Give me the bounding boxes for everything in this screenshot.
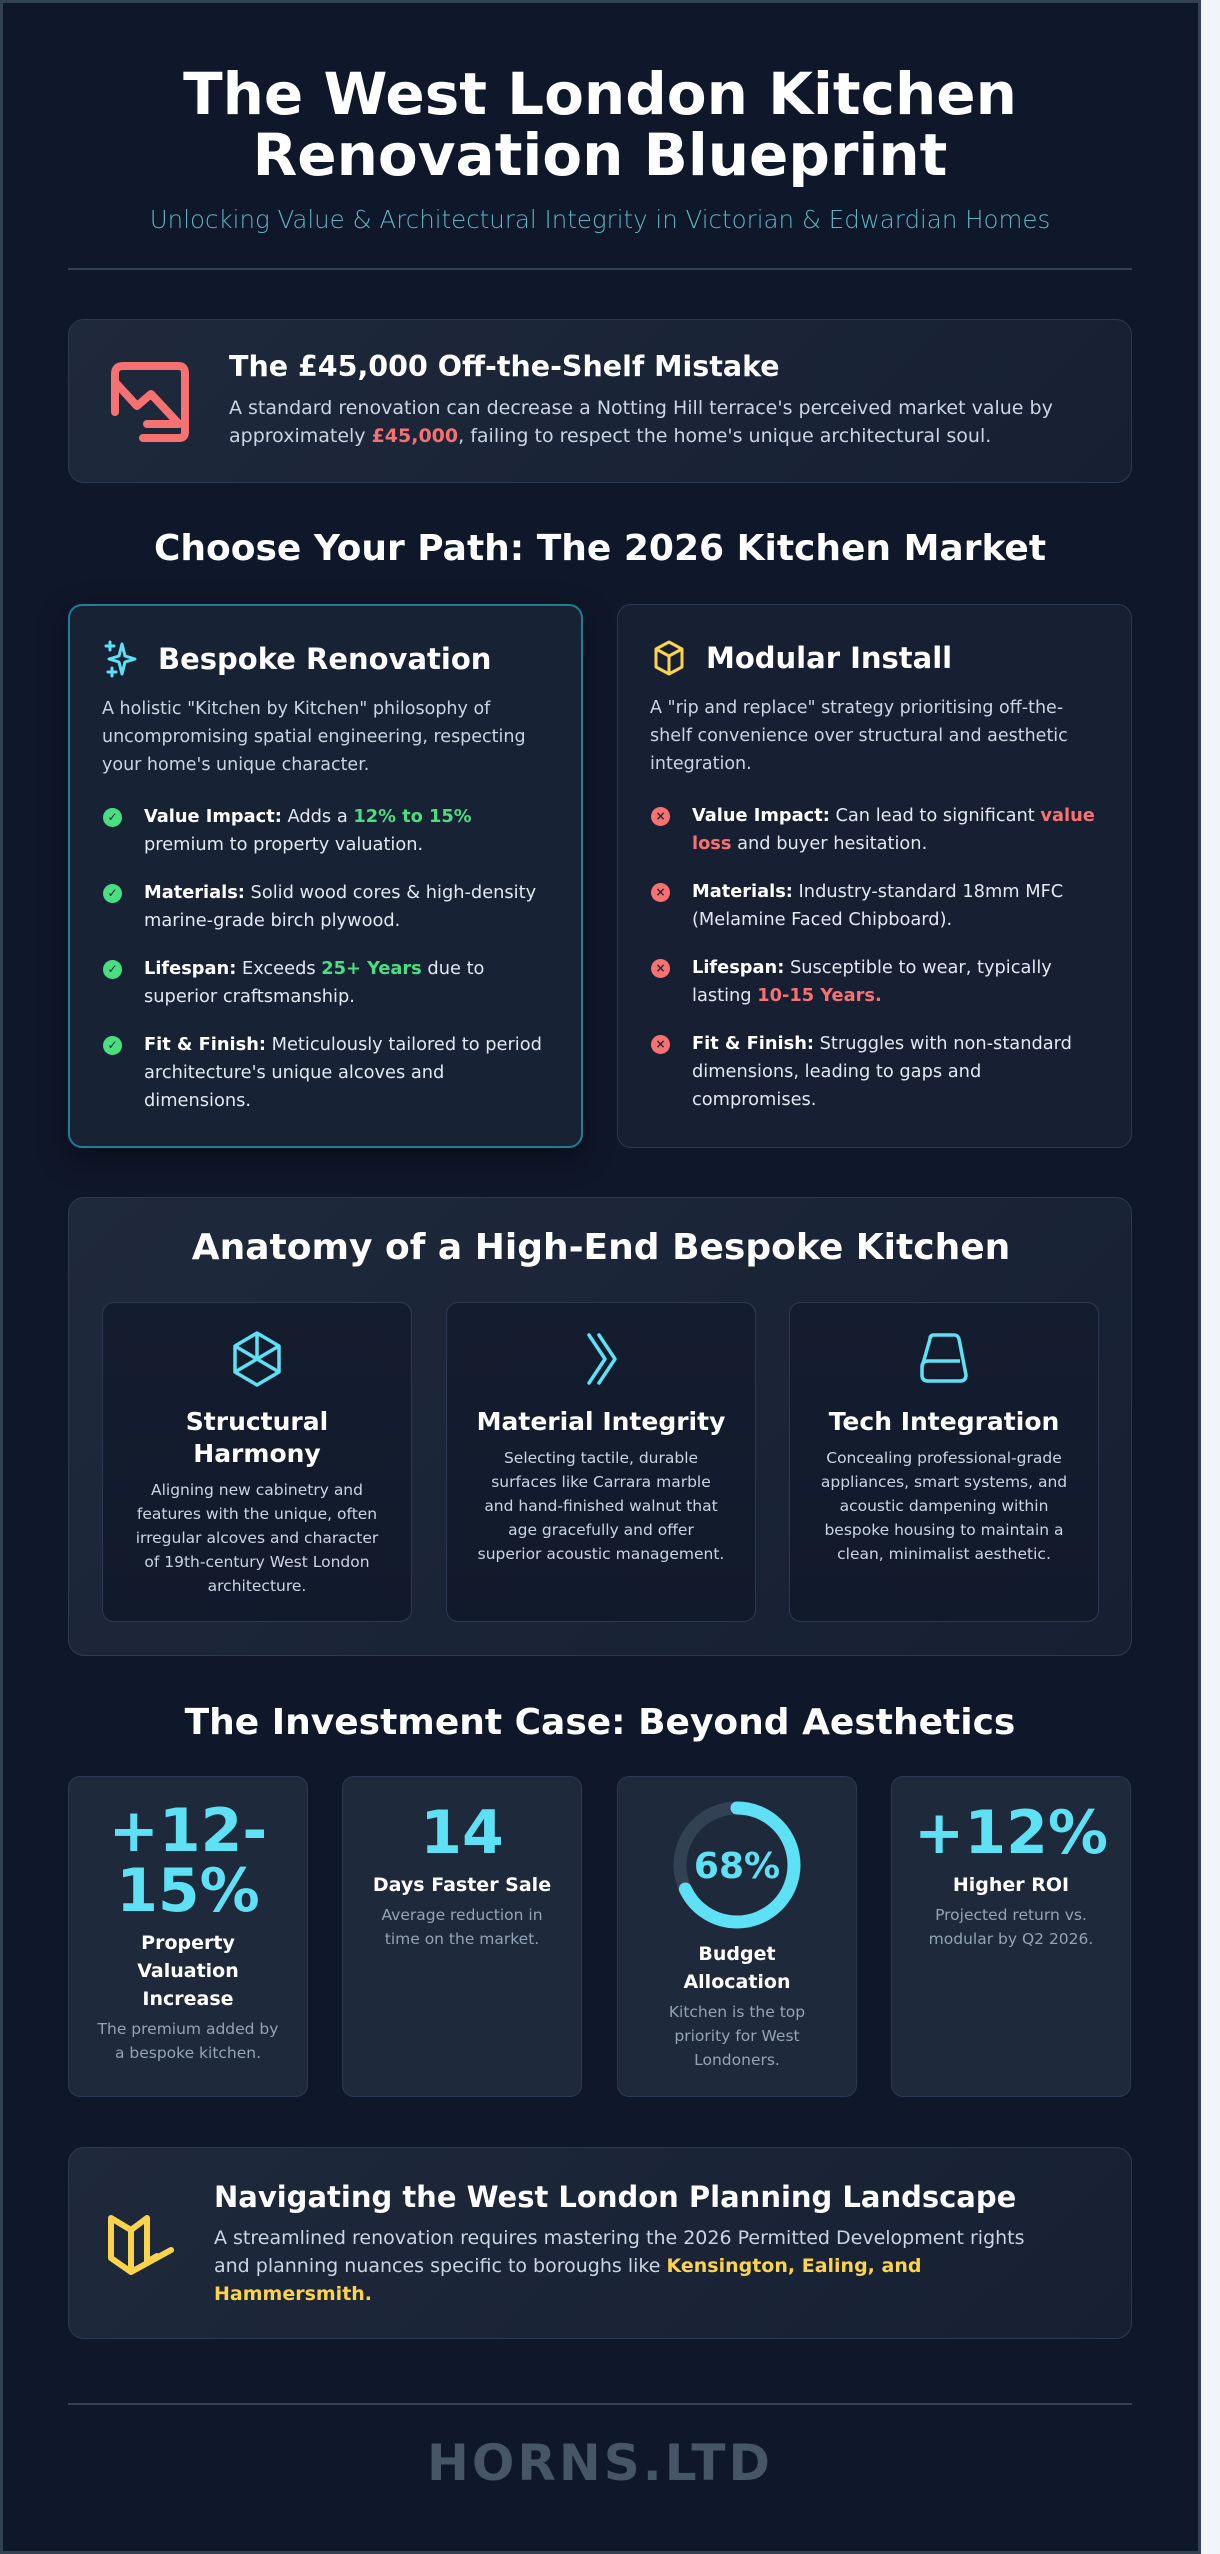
sub-card: material integrity: and hand-finished walnut that [484,1497,718,1515]
stat: ROI [891,1776,1131,2097]
stat: ROI: +12% [914,1798,1108,1868]
bespoke items [103,806,542,1111]
stat: ROI: modular by Q2 2026. [929,1930,1093,1948]
heading: investment case: The Investment Case: Beyond Aesthetics [185,1702,1015,1743]
icon: cube [233,1331,281,1387]
modular items: Fit & Finish: Struggles with non-standard dimensions, leading to gaps and compromises. [692,1033,1072,1110]
modular items: Lifespan: Susceptible to wear, typically lasting 10-15 Years. [692,957,1052,1006]
sub-card: tech integration: Concealing professional-grade appliances, smart systems, and acoustic dampening within bespoke housing to maintain a clean, minimalist aesthetic. [821,1449,1067,1563]
bespoke items: Materials: Solid wood cores & high-density marine-grade birch plywood. [144,882,536,931]
bespoke items: ✓ [107,1038,118,1052]
stat: budget donut: Allocation [683,1971,791,1993]
modular items: × [655,809,666,823]
modular items: Materials: Industry-standard 18mm MFC (Melamine Faced Chipboard). [692,881,1063,930]
modular items: × [655,1037,666,1051]
stat: valuation [68,1776,308,2097]
title: The West London Kitchen [183,60,1017,128]
sub-card: material integrity: Material Integrity [477,1407,725,1436]
sub-card: tech integration: Tech Integration [829,1407,1059,1436]
planning body: A streamlined renovation requires mastering the 2026 Permitted Development rights and planning nuances specific to boroughs like Kensington, Ealing, and Hammersmith. [214,2227,1025,2305]
panel: anatomy [68,1197,1132,1656]
modular items: × [655,885,666,899]
modular items: × [655,961,666,975]
bespoke items: ✓ [107,810,118,824]
sub-card: material integrity: Selecting tactile, durable [504,1449,698,1467]
planning heading: Navigating the West London Planning Landscape [214,2180,1016,2214]
stat: budget donut: Budget [698,1943,776,1965]
stat: ROI: Higher ROI [953,1874,1069,1896]
modular items [651,805,1095,1110]
heading: modular: Modular Install [706,641,952,675]
callout heading: The £45,000 Off-the-Shelf Mistake [229,350,780,383]
stat: valuation: Valuation [137,1960,239,1982]
sub-card: material integrity: superior acoustic management. [478,1545,724,1563]
callout: 45000 mistake [68,319,1132,483]
stat: valuation: 15% [116,1856,260,1926]
panel: modular install [617,604,1132,1148]
stat: days faster: Average reduction in [381,1906,543,1924]
modular items: Value Impact: Can lead to significant value loss and buyer hesitation. [692,805,1095,854]
subtitle: Unlocking Value & Architectural Integrity in Victorian & Edwardian Homes [150,205,1050,234]
bespoke items: Fit & Finish: Meticulously tailored to period architecture's unique alcoves and dimensions. [144,1034,542,1111]
anatomy heading: Anatomy of a High-End Bespoke Kitchen [192,1227,1010,1268]
stat: valuation: Increase [142,1988,234,2010]
icon: appliance [920,1333,968,1383]
stat: budget donut: Londoners. [694,2051,780,2069]
sub-card: material integrity: age gracefully and offer [508,1521,694,1539]
stat: valuation: The premium added by [98,2020,278,2038]
sub-card: structural harmony: Structural [186,1407,328,1436]
stat: days faster [342,1776,582,2097]
callout body: A standard renovation can decrease a Notting Hill terrace's perceived market value by approximately £45,000, failing to respect the home's unique architectural soul. [229,397,1053,447]
stat: budget donut: priority for West [674,2027,800,2045]
heading: bespoke: Bespoke Renovation [158,642,491,676]
stat: days faster: 14 [420,1798,504,1868]
sub-card: tech integration [789,1302,1099,1622]
modular description: A "rip and replace" strategy prioritising off-the-shelf convenience over structural and aesthetic integration. [650,698,1068,774]
bespoke items: Value Impact: Adds a 12% to 15% premium to property valuation. [144,806,472,855]
stat: days faster: time on the market. [385,1930,539,1948]
title [183,60,1017,189]
bespoke items: ✓ [107,962,118,976]
bespoke description: A holistic "Kitchen by Kitchen" philosophy of uncompromising spatial engineering, respecting your home's unique character. [102,699,526,775]
sub-card: structural harmony: Harmony [193,1439,321,1468]
stat: valuation: Property [141,1932,235,1954]
heading: choose your path: Choose Your Path: The 2026 Kitchen Market [154,528,1046,569]
stat: budget donut: Kitchen is the top [669,2003,805,2021]
stat: valuation: +12- [109,1796,267,1866]
icon: book [108,2215,174,2275]
footer brand: HORNS.LTD [427,2434,773,2492]
stat: ROI: Projected return vs. [935,1906,1087,1924]
panel: bespoke renovation [68,604,583,1148]
panel: planning [68,2147,1132,2339]
sub-card: material integrity [446,1302,756,1622]
donut chart 68%: 68% [694,1846,780,1887]
sub-card: structural harmony: Aligning new cabinetry and features with the unique, often irregular alcoves and character of 19th-century West London architecture. [136,1481,378,1595]
icon: chevrons [587,1333,617,1385]
bespoke items: ✓ [107,886,118,900]
icon: trending down chart [111,362,189,442]
bespoke items: Lifespan: Exceeds 25+ Years due to superior craftsmanship. [144,958,484,1007]
donut chart 68% [674,1802,800,1928]
sub-card: material integrity: surfaces like Carrara marble [491,1473,711,1491]
stat: days faster: Days Faster Sale [373,1874,551,1896]
stat: valuation: a bespoke kitchen. [115,2044,261,2062]
stat: budget donut [617,1776,857,2097]
sub-card: structural harmony [102,1302,412,1622]
title: Renovation Blueprint [253,121,947,189]
